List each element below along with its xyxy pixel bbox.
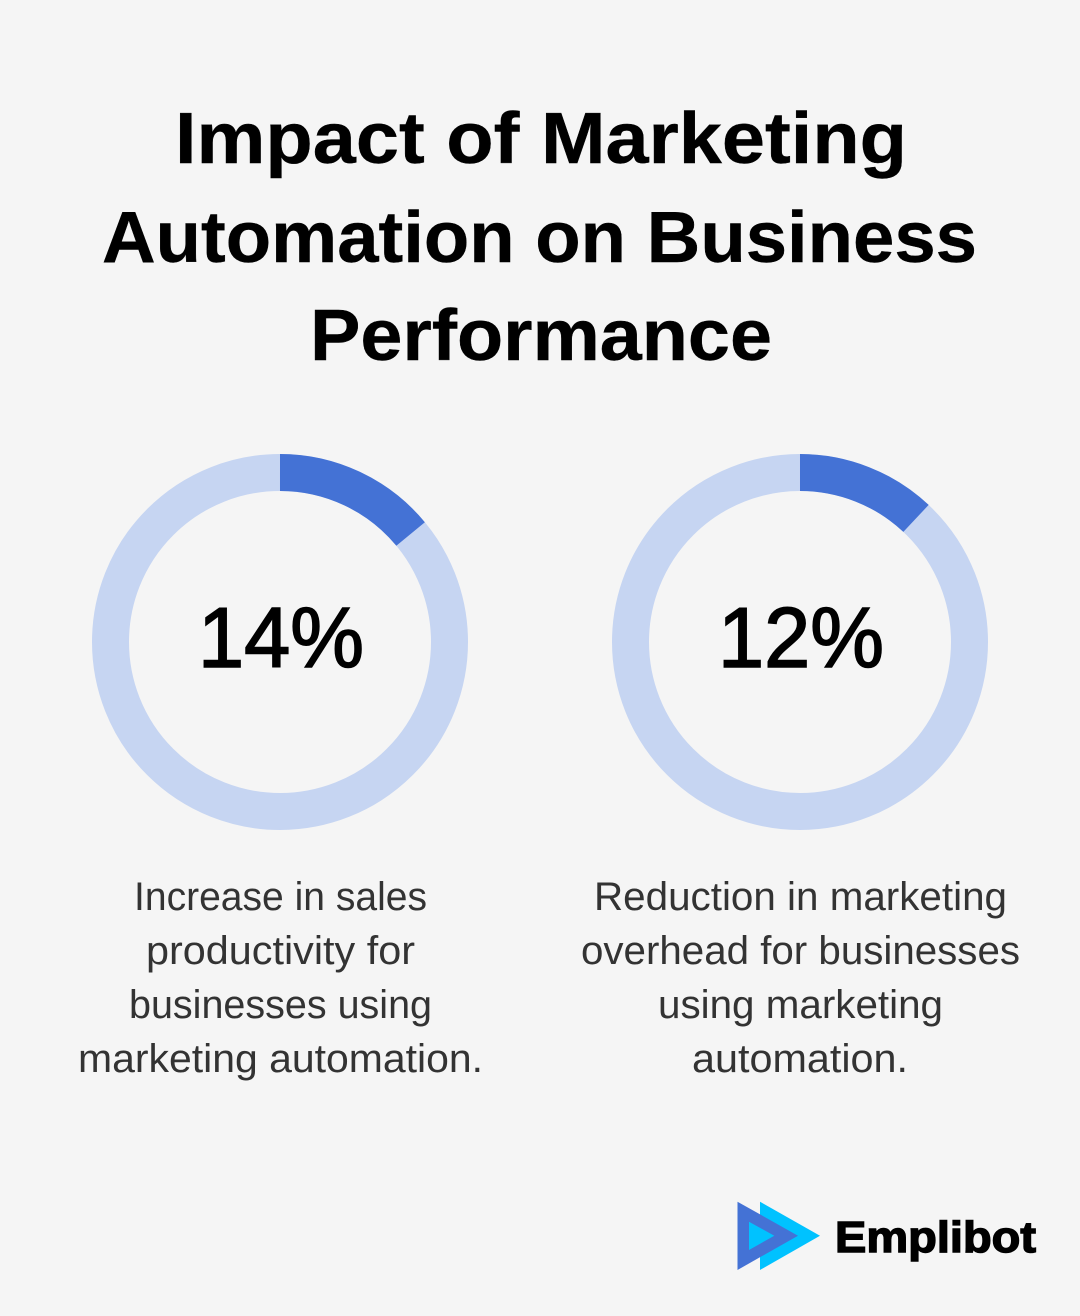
description: sales productivity: productivity for: [146, 929, 415, 973]
description: sales productivity: businesses using: [129, 983, 432, 1027]
title: Performance: [310, 296, 772, 376]
logo wordmark: Emplibot: [835, 1213, 1036, 1262]
description: sales productivity: Increase in sales: [134, 875, 427, 919]
description: marketing overhead: Reduction in marketing: [594, 875, 1007, 919]
logo: Emplibot: [738, 1202, 1036, 1270]
icon: play triangles: [738, 1202, 820, 1270]
donut chart: 12%: [630, 472, 970, 812]
description: marketing overhead: automation.: [692, 1037, 908, 1081]
description: sales productivity: marketing automation.: [78, 1037, 483, 1081]
description: sales productivity: [78, 875, 483, 1081]
description: marketing overhead: using marketing: [658, 983, 943, 1027]
donut chart: 14%: [110, 472, 450, 812]
stat value: 14%: 14%: [198, 591, 364, 686]
description: marketing overhead: [581, 875, 1020, 1081]
stat value: 12%: 12%: [718, 591, 884, 686]
panel: 12% marketing overhead: [581, 472, 1020, 1081]
title: Impact of Marketing: [175, 99, 907, 179]
panel: 14% sales productivity: [78, 472, 483, 1081]
title: [102, 99, 977, 376]
title: Automation on Business: [102, 198, 977, 278]
description: marketing overhead: overhead for businesses: [581, 929, 1020, 973]
